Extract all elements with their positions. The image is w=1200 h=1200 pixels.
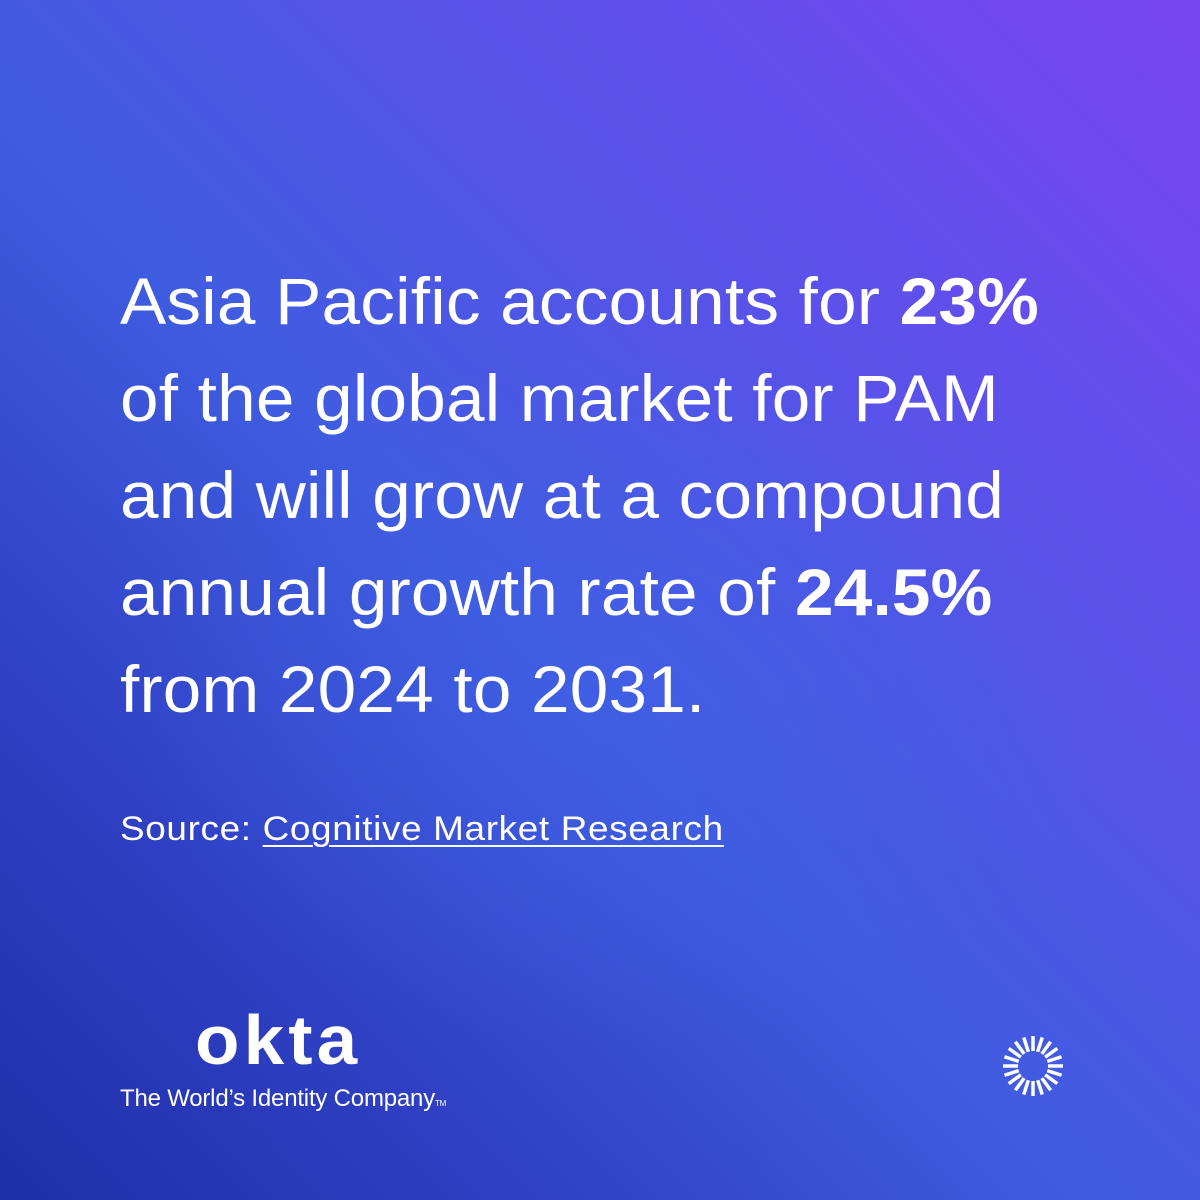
source line: Source: Cognitive Market Research [120, 810, 724, 848]
headline text: annual growth rate of 24.5% [120, 555, 993, 629]
headline text [120, 264, 1039, 726]
icon: sunburst [1003, 1036, 1063, 1096]
headline text: and will grow at a compound [120, 458, 1004, 532]
headline text: Asia Pacific accounts for 23% [120, 264, 1039, 338]
headline text: of the global market for PAM [120, 361, 999, 435]
okta logo: okta [195, 1001, 361, 1079]
headline text: from 2024 to 2031. [120, 652, 706, 726]
tagline: The World’s Identity CompanyTM [120, 1085, 446, 1112]
